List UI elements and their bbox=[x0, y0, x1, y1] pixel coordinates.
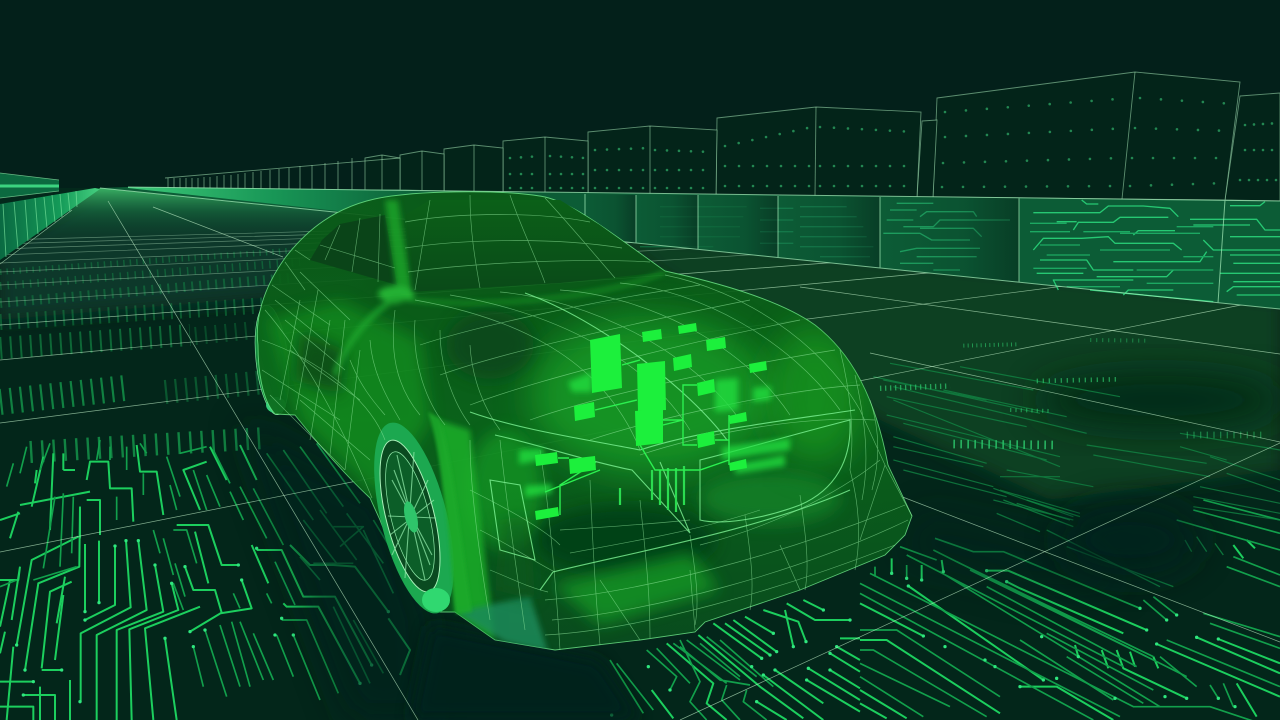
car body shell bbox=[257, 192, 912, 650]
shadow patch on the right floor bbox=[1035, 372, 1280, 428]
wall panels shading bbox=[585, 194, 636, 243]
car bbox=[250, 192, 912, 652]
far end of the wall bbox=[128, 187, 420, 220]
sky and building backdrop bbox=[0, 0, 1280, 201]
bottom right traces bbox=[860, 500, 1280, 720]
far distant strip on the left bbox=[0, 173, 59, 198]
floor green tint on the right bbox=[600, 230, 1280, 500]
lines toward the road vanishing point bbox=[0, 201, 1280, 720]
floor shadows around the car bbox=[240, 420, 1200, 720]
front wheel bbox=[358, 415, 470, 621]
floor grid lines bbox=[0, 201, 1280, 720]
lower left pads bbox=[17, 541, 388, 702]
left guard wall bbox=[0, 188, 100, 260]
processor connector lines bbox=[545, 360, 729, 515]
wall surface bbox=[100, 187, 1280, 309]
wall circuit traces bbox=[640, 200, 1280, 302]
bottom middle traces bbox=[610, 600, 860, 720]
building light dots bbox=[510, 98, 1280, 188]
wall panel edges bbox=[100, 187, 1280, 309]
headlights and grille lines bbox=[470, 293, 855, 590]
far cross lines bbox=[0, 227, 764, 302]
right floor dashed chip rows bbox=[880, 340, 1263, 445]
blurred processor glows bbox=[519, 372, 790, 497]
road floor bbox=[0, 188, 1280, 720]
far dashed trace rows on the left bbox=[0, 250, 300, 452]
near cross lines bbox=[0, 262, 1280, 720]
rear wheel bbox=[250, 304, 294, 416]
wireframe mesh bbox=[262, 195, 912, 650]
windshield bbox=[405, 200, 665, 292]
buildings skyline bbox=[165, 72, 1280, 201]
body light and shadow bbox=[268, 300, 865, 652]
right wall bbox=[100, 187, 1280, 309]
floor green tint in the distance bbox=[0, 209, 335, 320]
grille bars bbox=[620, 466, 684, 512]
bright pillar glow bbox=[335, 200, 665, 375]
fender over wheel bbox=[428, 412, 472, 614]
bright processor blocks bbox=[535, 323, 767, 520]
right floor soft traces bbox=[873, 340, 1280, 520]
lower left traces bbox=[0, 440, 410, 720]
side window bbox=[310, 215, 397, 285]
horizon glow on the floor bbox=[48, 188, 336, 228]
building outlines bbox=[165, 72, 1280, 201]
